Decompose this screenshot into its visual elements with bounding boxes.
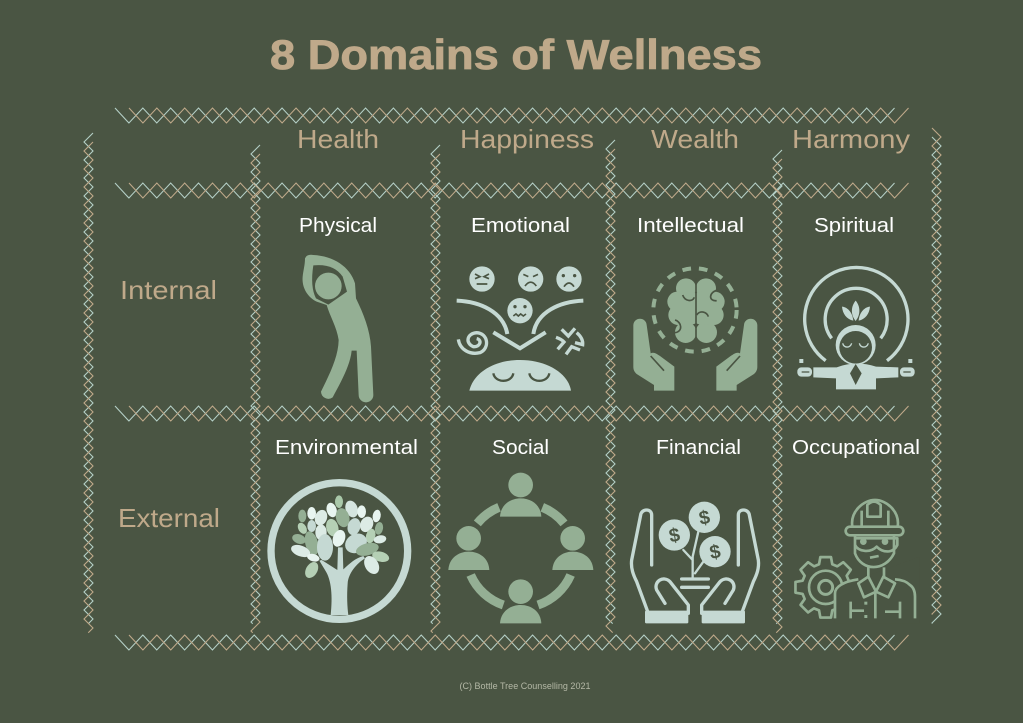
icon: circle of people (social) [448, 473, 593, 623]
column headings [297, 124, 910, 154]
icon: money plant in hands (financial): $ [708, 541, 723, 564]
row heading: external: External [118, 503, 220, 533]
icon: meditating figure (spiritual) [797, 267, 915, 389]
domain labels: Intellectual [637, 215, 744, 237]
title: 8 Domains of Wellness [270, 31, 762, 78]
icon: engineer with gear (occupational) [795, 500, 920, 623]
column headings: Harmony [792, 124, 910, 154]
domain labels: Spiritual [814, 215, 894, 237]
column headings: Health [297, 124, 379, 154]
domain labels: Social [492, 437, 549, 459]
column headings: Happiness [460, 124, 594, 154]
icon: money plant in hands (financial) [631, 502, 759, 623]
icon: brain in hands (intellectual) [633, 268, 757, 391]
table grid of zigzag lines [84, 108, 941, 663]
domain labels: Emotional [471, 215, 570, 237]
domain labels: Occupational [792, 437, 920, 459]
row heading: internal: Internal [120, 275, 217, 305]
column headings: Wealth [651, 124, 739, 154]
icon: money plant in hands (financial): $ [667, 525, 682, 547]
domain labels: Financial [656, 437, 741, 459]
domain labels: Physical [299, 215, 377, 237]
domain labels [275, 215, 920, 459]
icon: stretching person (physical) [303, 255, 373, 402]
domain labels: Environmental [275, 437, 418, 459]
footer credit: (C) Bottle Tree Counselling 2021 [460, 681, 590, 691]
icon: tree in circle (environmental) [271, 483, 408, 619]
icon: emotions (emotional) [457, 266, 583, 391]
icon: money plant in hands (financial): $ [697, 507, 712, 530]
